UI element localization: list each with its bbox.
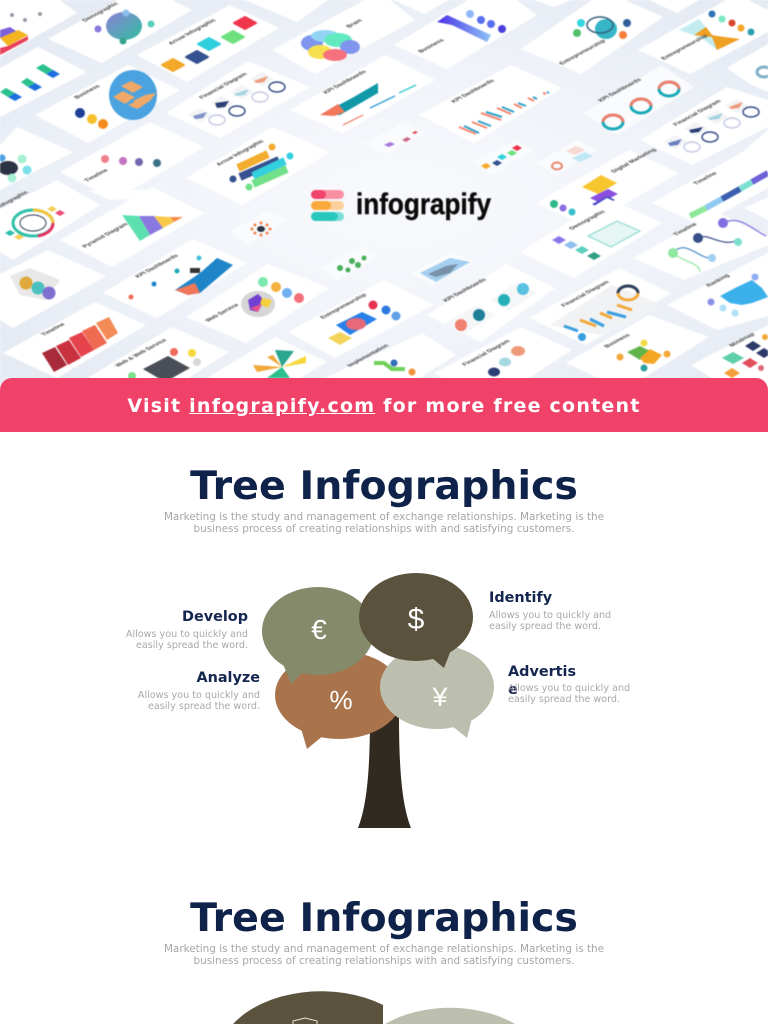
thumbnail: KPI bar chart card — [419, 65, 562, 143]
label: analyze: Analyze — [196, 670, 260, 686]
thumbnail: pyramid diagram card — [60, 187, 204, 267]
thumbnail: demographic card — [48, 0, 192, 63]
thumbnail: hourglass card — [638, 0, 768, 74]
thumbnail: KPI area card two: KPI Dashboards — [134, 254, 181, 279]
thumbnail: demographic document card: Demographic — [568, 209, 608, 231]
thumbnail: implementation card — [325, 333, 456, 390]
thumbnail: entrepreneurship card — [288, 280, 433, 358]
label: identify: easily spread the word. — [489, 621, 601, 632]
thumbnail: implementation card: Implementation — [346, 344, 391, 368]
thumbnail: web gear card: Web Service — [204, 303, 242, 323]
label: develop: easily spread the word. — [136, 640, 248, 651]
subtitle: second section: business process of creating relationships with and satisfying customers. — [193, 955, 575, 967]
thumbnail: small bars card — [365, 122, 425, 155]
thumbnail: ranking map card — [667, 253, 768, 330]
thumbnail: KPI gauges card: KPI Dashboards — [442, 278, 489, 303]
thumbnail: red timeline card: Timeline — [40, 322, 68, 337]
thumbnail: business card: Business — [73, 84, 103, 100]
bubble: euro — [262, 587, 374, 684]
thumbnail: tie business card: Business — [417, 38, 447, 54]
tree trunk — [358, 715, 411, 828]
thumbnail: KPI area chart card — [290, 55, 435, 133]
thumbnail: timeline dots card — [60, 122, 204, 200]
thumbnail: red timeline card — [3, 302, 146, 378]
thumbnail: mind map card: Mindmap — [728, 332, 757, 348]
thumbnail: financial bars and donut card — [529, 268, 671, 345]
label: develop: Develop — [182, 609, 248, 625]
label: analyze — [138, 670, 260, 712]
logo: infograpify — [356, 188, 491, 221]
thumbnail: entrepreneurship card: Entrepreneurship — [319, 293, 369, 320]
second tree: dark bubble — [233, 991, 383, 1024]
background collage of infographic thumbnails — [0, 0, 768, 388]
title: first section: Tree Infographics — [190, 463, 578, 509]
thumbnail: demographic document card — [520, 198, 662, 278]
thumbnail: web and web service card — [89, 327, 229, 390]
bubble: dollar — [359, 573, 473, 668]
subtitle: second section — [164, 943, 604, 967]
thumbnail: digital marketing card — [536, 148, 679, 226]
second tree: grey bubble — [385, 1008, 515, 1024]
thumbnail: financial bars and donut card: Financial Diagram — [560, 280, 611, 308]
label: identify — [489, 590, 611, 632]
subtitle: second section: Marketing is the study and management of exchange relationships. Marketing is the — [164, 943, 604, 955]
label: analyze: Allows you to quickly and — [138, 690, 260, 701]
logo — [311, 188, 491, 221]
thumbnail: mini arrow card — [472, 140, 532, 175]
subtitle: first section: Marketing is the study and management of exchange relationships. Marketing is the — [164, 511, 604, 523]
thumbnail: star card — [207, 337, 327, 390]
thumbnail: mini donut card — [537, 140, 596, 175]
label: advertise — [508, 664, 576, 698]
thumbnail: financial diagram bottom card: Financial Diagram — [461, 339, 512, 367]
thumbnail: hex business card: Business — [603, 333, 633, 349]
thumbnail: pyramid diagram card: Pyramid Diagram — [81, 222, 130, 249]
thumbnail: top right pie card — [727, 44, 768, 92]
thumbnail: small green card — [319, 247, 380, 281]
label: identify: Identify — [489, 590, 552, 606]
thumbnail: ecosystem card — [521, 0, 663, 74]
subtitle: first section: business process of creating relationships with and satisfying customers. — [193, 523, 575, 535]
thumbnail: small radial card — [228, 211, 289, 245]
thumbnail: financial diagram card right: Financial Diagram — [672, 99, 723, 127]
thumbnail: mind map card — [691, 325, 768, 390]
bubble: yen — [380, 645, 494, 738]
thumbnail: hex business card — [566, 315, 709, 390]
thumbnail: left circle card — [0, 127, 73, 190]
thumbnail: stacked bars card — [0, 47, 87, 117]
thumbnail: financial diagram card — [166, 61, 310, 138]
thumbnail: demographic card: Demographic — [81, 1, 121, 23]
promo banner — [0, 378, 768, 432]
label: develop: Allows you to quickly and — [126, 629, 248, 640]
bubble: yen: ¥ — [431, 682, 448, 712]
thumbnail: ranking map card: Ranking — [705, 274, 732, 288]
label: advertise description: easily spread the word. — [508, 694, 620, 705]
thumbnail: financial diagram card: Financial Diagram — [198, 72, 249, 100]
thumbnail: business card — [35, 65, 180, 143]
thumbnail: KPI donuts panel: KPI Dashboards — [597, 78, 644, 103]
thumbnail: arrow infographic card two: Arrow Infographic — [215, 139, 267, 167]
thumbnail: list card — [0, 0, 77, 57]
thumbnail: small fill card — [745, 130, 768, 165]
thumbnail: timeline card top right — [652, 150, 768, 225]
thumbnail: ecosystem card: Entrepreneurship — [558, 39, 608, 66]
bubble: dollar: $ — [408, 603, 425, 636]
label: advertise: Advertis — [508, 664, 576, 680]
title: second section: Tree Infographics — [190, 895, 578, 941]
thumbnail: KPI area chart card: KPI Dashboards — [322, 70, 369, 95]
thumbnail: arrow infographic card — [137, 5, 279, 82]
thumbnail: arrow infographic card two — [186, 127, 330, 205]
thumbnail: winding timeline card — [633, 212, 768, 280]
second tree: shield icon — [293, 1018, 317, 1024]
bubble: percent — [275, 651, 403, 749]
thumbnail: timeline card top right: Timeline — [692, 171, 720, 186]
thumbnail: brain card: Brain — [345, 19, 365, 29]
thumbnail: hourglass card: Entrepreneurship — [660, 34, 710, 61]
thumbnail: KPI area card two — [103, 239, 247, 318]
label: advertise description — [508, 683, 630, 705]
thumbnail: financial diagram bottom card — [434, 327, 572, 390]
promo banner: Visit infograpify.com for more free content — [127, 395, 641, 417]
thumbnail: financial diagram card right — [640, 87, 768, 165]
label: analyze: easily spread the word. — [148, 701, 260, 712]
thumbnail: timeline dots card: Timeline — [83, 168, 111, 183]
thumbnail: tie business card — [394, 0, 537, 69]
label: develop — [126, 609, 248, 651]
label: advertise: e — [508, 682, 518, 698]
thumbnail: winding timeline card: Timeline — [672, 222, 700, 237]
bubble: percent: % — [329, 685, 353, 715]
bubble: euro: € — [311, 614, 327, 645]
thumbnail: KPI gauges card — [427, 264, 555, 342]
thumbnail: digital marketing card: Digital Marketing — [610, 148, 658, 174]
thumbnail: web and web service card: Web & Web Service — [114, 338, 169, 368]
thumbnail: fish map card — [411, 252, 474, 285]
thumbnail: web gear card — [186, 264, 329, 343]
subtitle: first section — [164, 511, 604, 535]
thumbnail: arrow infographic card: Arrow Infographic — [167, 18, 219, 46]
thumbnail: circle infographic card — [0, 180, 100, 260]
label: advertise description: Allows you to quickly and — [508, 683, 630, 694]
thumbnail: KPI donuts panel — [584, 65, 694, 135]
thumbnail: KPI bar chart card: KPI Dashboards — [450, 79, 497, 104]
thumbnail: brain card — [272, 0, 415, 74]
label: identify: Allows you to quickly and — [489, 610, 611, 621]
thumbnail: hex process card — [0, 250, 106, 328]
